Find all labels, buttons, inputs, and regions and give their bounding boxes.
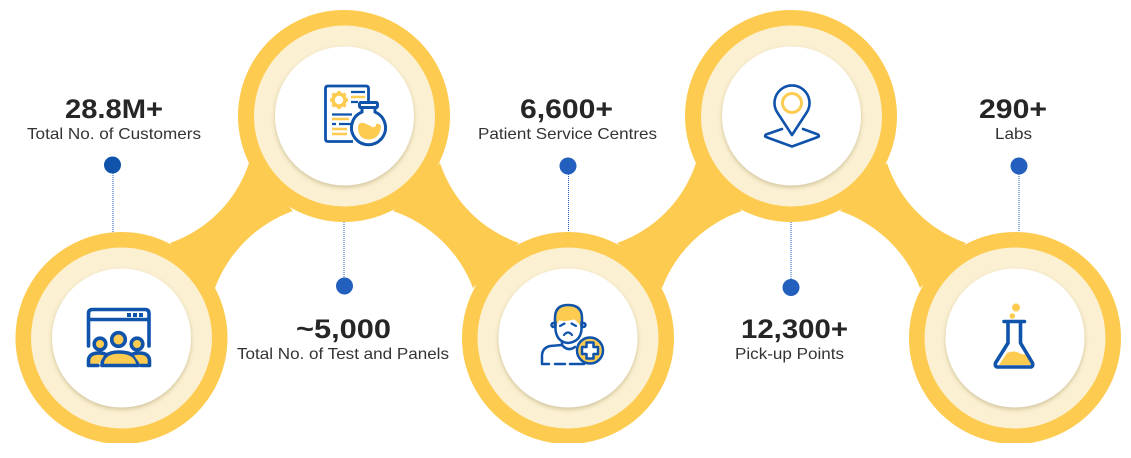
stat: customers [27, 94, 201, 232]
stat: patient service centres: Patient Service Centres [478, 126, 657, 143]
node 1: customers [31, 248, 212, 428]
stat: pick-up points: 12,300+ [741, 314, 848, 344]
node 4: pick-up points [701, 26, 882, 206]
stat: patient service centres [478, 94, 657, 232]
stat: tests and panels [237, 222, 449, 363]
icon: location pin on map [765, 85, 819, 146]
stat: tests and panels: Total No. of Test and Panels [237, 346, 449, 363]
stat: pick-up points: Pick-up Points [735, 346, 844, 363]
stat: labs [979, 94, 1047, 232]
stat: pick-up points [735, 222, 848, 363]
icon: lab report and flask [326, 86, 386, 145]
stat: labs: Labs [995, 126, 1032, 143]
stat: customers: 28.8M+ [65, 94, 163, 124]
icon: conical flask [995, 304, 1033, 367]
icon: patient with medical cross [542, 305, 603, 364]
stat: labs: 290+ [979, 94, 1047, 124]
stat: customers: Total No. of Customers [27, 126, 201, 143]
stat: patient service centres: 6,600+ [520, 94, 613, 124]
node 5: labs [924, 248, 1106, 428]
icon: customers on window [88, 310, 150, 366]
stat: tests and panels: ~5,000 [296, 314, 391, 344]
node 2: tests and panels [254, 26, 435, 206]
node 3: patient service centres [478, 248, 658, 428]
